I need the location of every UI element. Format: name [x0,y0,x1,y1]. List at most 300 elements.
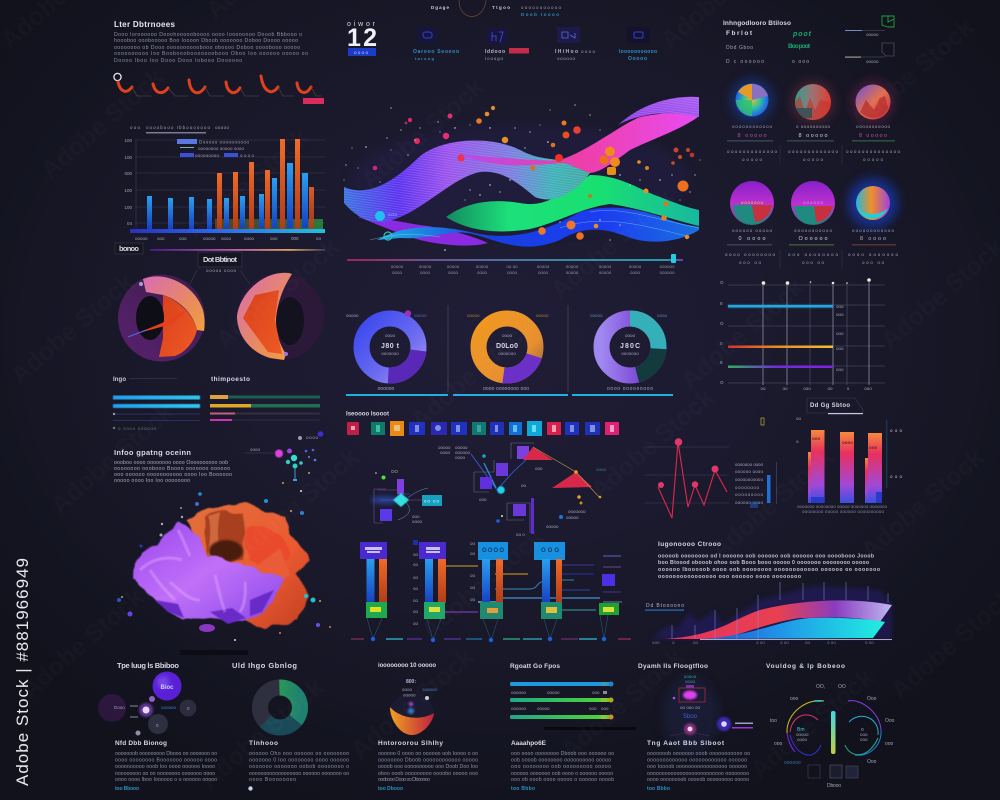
panel: top right: poot [792,31,812,38]
chart: horizontal range chart: ooo [836,346,844,351]
stock watermark pattern: Adobe Stock [346,643,479,765]
panel: bottom column 5: Tng Aaot Bbb Slboot [647,740,725,747]
bubble network: Bioc [160,685,174,691]
heading: Iseoooo Isooot [346,412,389,418]
wave timeline: oooo [477,270,488,275]
ring 2: D0Lo0 [496,343,518,350]
stat 3: IHiHoo [555,49,578,55]
chart: horizontal range chart: ooo [864,386,872,391]
text block: left mid: ooo oooooo ooooooooooo oooo Ioo Boooooo [114,472,232,478]
glow bars: oooooo [511,690,527,695]
panel: bottom column 3: ioooooooo 10 ooooo [378,663,436,669]
flow diagram right: ooooooo [568,509,586,514]
chart: horizontal range chart: ooo [836,331,844,336]
panel: progress bars [113,376,320,431]
grid [135,140,325,228]
ring 1 [346,310,448,396]
chart: bar chart [124,125,325,241]
purple highlight folds [140,530,245,612]
ring 3: ooooo [590,313,603,318]
chart legend: ooooooooo [195,153,219,158]
panel: bottom column 1: Nfd Dbb Bionog [115,740,167,747]
flow diagram right: ooooo [566,515,579,520]
wave timeline: ooooo [419,264,432,269]
panel: bottom column 3: too Dbooo [378,786,403,792]
chart: area chart: o oo [756,640,765,645]
text block: right [658,541,880,580]
wave timeline: oooo [538,270,549,275]
panel: bottom column 3 [378,663,478,792]
stat 2: Iddooo [485,49,505,55]
panel: bottom column 2: oooooo Oho ooo oooooo oo oooooooo [249,751,349,757]
circle card 2: ooooo [803,157,823,162]
stat 3: oooo [581,49,595,54]
panel: bottom column 2: Tlnhooo [249,740,278,747]
paragraph: oooooooo ob Dooo oooooooooobooo oboooo Doboo oooobooo ooooo [114,45,300,51]
column 2 [413,540,446,642]
stat 1 [413,27,459,61]
circle card 5: ooo oooooooo [788,252,838,257]
stat 4: Iooooooooooo [619,49,657,55]
circle card 3 [846,80,900,162]
panel: bottom column 6: ooo [860,737,868,742]
network cluster [245,431,323,492]
label box [115,243,143,254]
icon: green tag [882,16,894,27]
bubble network: 0 [187,706,190,711]
chart: area chart: oo [805,640,811,645]
panel: bottom column 4: ooo oooooooo oob ooooooooo ooooo [511,764,611,770]
panel: progress bars: Ingo [113,377,126,383]
chart: line chart [645,418,777,518]
column 5 [599,574,619,641]
cyan marker: ooo [388,212,397,217]
purple skirt [133,522,285,623]
half disc: oooo [402,687,413,692]
blue lower band [377,208,699,247]
blue bars: o oooo oooooo [118,426,156,431]
circle card 6: ooo oo [862,260,884,265]
wave timeline: oo oo [506,264,518,269]
donut [260,688,300,728]
panel: bottom column 1: oooo oooooooo Booooooo oooooo oooo [115,758,217,764]
chart: bar chart: ooooo [203,236,216,241]
panel: bottom column 1 [98,661,217,792]
flow diagram right: oo [521,483,527,488]
chart: horizontal range chart: O [720,380,724,385]
ring 2: ooooo [536,313,549,318]
circle card 1: ooooo [742,157,762,162]
panel: bottom column 6: OO, [816,684,825,690]
chart: horizontal range chart: oo [782,386,788,391]
circle card 4: oooo oooooooo [725,252,775,257]
flow diagram right: oooooo [455,450,471,455]
column 1 [360,542,387,641]
chart: gradient bar chart: o [796,439,799,444]
stat 4 [619,27,657,62]
wave timeline: ooooo [566,270,579,275]
ring 1: oooo [385,333,396,338]
column 3: oo [470,585,476,590]
chart: area chart: ooo [652,640,660,645]
chart: area chart: o oo [865,640,874,645]
panel: top centre: Dgage [431,5,449,10]
column 4 [534,542,565,641]
panel: bottom column 2 [232,661,349,791]
stock watermark pattern: Adobe Stock [181,123,314,245]
icon: tablet [846,766,858,778]
panel: bottom column 1: oooo oooo Iboo Ioooooo o o oooooo ooooo [115,777,217,783]
ring 3: oooo ooooooooo [607,386,653,392]
text block: left mid: ooooo oooo Ioo Ioo oooooooo [114,478,190,484]
paragraph: oooooooooo Ioo Boobooobooooooobooo Oboo Ioo oooooo ooooo oo [114,51,308,57]
text block: left mid: oooboo oooo oooooooo oooo Oooooooooo oob [114,460,228,466]
stock watermark pattern: Adobe Stock [406,313,539,435]
chart: bar chart: 000 [124,171,132,176]
chart: flowing wave [344,97,700,251]
circle card 6: 8 oooo [860,236,886,242]
node graphic [663,674,753,753]
text block: right: ooooob oooooooo od I oooono oob oooooo oob oooooo ooo oooobooo Jooob [658,554,874,560]
legend: ooooooooooo [735,477,763,482]
pink tag [303,98,324,104]
node graphic: oooo [685,679,696,684]
ring 1: ooooo [414,313,427,318]
stat 3: oooooo [557,56,575,61]
panel: bottom column 1: ooooooob ooooooooo Dbooo oo ooooooo oo [115,751,217,757]
flow diagram right: ooooo [455,445,468,450]
panel: bottom column 6: Ooo [867,696,877,702]
column 2: oo [413,598,419,603]
panel: bottom column 5: too Bbbo [647,786,670,792]
circle card 6: oooo ooooooo [848,252,898,257]
panel: bottom column 3: oooooooo Dboob oooooooooooo ooooo [378,758,478,764]
glow bars: ooo [589,706,597,711]
stock watermark pattern: Adobe Stock [196,673,329,795]
stock watermark pattern: Adobe Stock [231,443,364,565]
node graphic: oo ooo oo [680,705,701,710]
chart: bar chart: ooo [179,236,187,241]
wave timeline: oooo [448,270,459,275]
ring 2: ooooooo [498,351,516,356]
chart: gradient bar chart: ooo [890,474,902,479]
stock watermark pattern: Adobe Stock [556,643,689,765]
stat 2: Iooogo [485,56,503,61]
paragraph: Dooo Ioroooooo Dooohoooooboooo oooo Ioooooooo Dooob Bbbooo o [114,32,302,38]
stock watermark pattern: Adobe Stock [676,273,809,395]
chart: bar chart: 04 [127,221,132,226]
legend: ooooooooo [735,492,763,497]
panel: bottom column 3: ooobooo Dooo oo Dbooooo [378,777,430,783]
circle card 5 [788,181,838,265]
column 3: OOOO [482,548,504,554]
ring 1: ooooo [346,313,359,318]
circle card 6 [848,178,898,265]
green band [446,175,699,231]
glow bars: ooo [601,706,609,711]
wave timeline: ooooo [391,264,404,269]
panel: bottom column 6: oooo [797,737,808,742]
stock watermark pattern: Adobe Stock [211,233,344,355]
chart: bar chart: ooooo [215,125,229,130]
panel: bottom column 1: oooooooooo ooob Ioo oooo oooooo Ioooo [115,764,215,770]
circle card 5: Oooooo [798,236,828,242]
node graphic: Sboo [683,714,698,720]
connectors [445,556,622,612]
text block: left mid: oooooooo ooobooo Boooo ooooooo oooooo [114,466,230,472]
multi-colour bars [210,395,320,421]
panel: top right: Inhngodlooro Btiloso [723,20,791,27]
sparkle dust [344,104,700,251]
panel: bottom column 6: ooo [790,696,799,702]
chart: gradient bar chart [796,398,902,514]
wave timeline: oooo [630,270,641,275]
wave timeline: oooo [392,270,403,275]
text block: right: oooooo Ibooooob oooo oob oooooooo oooooooooooo oooooo oo ooooooo [658,567,880,573]
panel: bottom column 3: oooob ooo oooooooooo ooo Doob Doo Ioo [378,764,478,770]
bullet [248,786,253,791]
heading: Lter Dbtrnoees [114,20,176,29]
chart legend: Dooooo oooooooooo [199,140,249,144]
chart: gradient bar chart: ooo [869,445,877,450]
wave timeline: oooooo [659,264,675,269]
left donut [118,274,205,362]
column 2: oo [413,621,419,626]
flow diagram right [438,443,607,537]
date counter: oooo [354,50,368,55]
circle card 3: ooooooooooo [856,124,890,129]
paragraph [114,32,308,64]
node graphic: ooooo [684,674,697,679]
chart: horizontal range chart: 0 [720,341,723,346]
chart: bar chart: 100 [124,188,132,193]
circle card 3: 8 ooooo [859,133,887,139]
legend: oooooo oooo [735,469,763,474]
chart: area chart: oo [693,640,699,645]
chart: bar chart: ooo [130,125,140,130]
circle card 1: ooooooooooooo [727,149,777,154]
panel: dual donut charts [118,252,324,362]
panel: bottom column 4: Rgoatt Go Fpos [510,663,560,670]
dark strip below blob [180,650,248,655]
panel: bottom column 6: ooo [885,741,894,747]
chart: bar chart: 000 [291,236,299,241]
panel: top right: Fbrlot [726,30,753,37]
chart: area chart: Dd Btoooono [646,603,684,609]
wave timeline: ooooo [629,264,642,269]
chart: bar chart: 100 [124,205,132,210]
chart: bar chart: oooo [221,236,232,241]
panel: bottom column 6: oooooo [784,760,801,766]
circle card 3: ooooo [863,157,883,162]
circle card 5: ooo oo [802,260,824,265]
panel: bottom column 1: Tpe luug ls Bbiboo [117,661,179,670]
column 2: oo [413,575,419,580]
stock watermark pattern: Adobe Stock [6,268,139,390]
panel: bottom column 3: oooooo 0 oooo oo oooooo oob Ioooo o oo [378,751,478,757]
panel: bottom column 1: too Bbooo [115,786,139,792]
panel: top right: Dbd Gboo [726,45,753,51]
circle card 2 [787,80,838,162]
icon: grey tag [882,43,894,56]
label box [198,252,242,267]
gradient timeline [150,249,325,251]
text block: right: oooooooooooooooo ooo oooooo oooo oooooooo [658,574,801,580]
stock watermark pattern: Adobe Stock [46,398,179,520]
stock watermark pattern: Adobe Stock [356,73,489,195]
circle card 4: ooooooo [741,200,763,205]
chart: bar chart: 100 [124,138,132,143]
panel: dual donut charts: ooooo oooo [206,268,236,273]
chart: gradient bar chart: ooooooo oooooooo ooooo ooooooo ooooooo [797,504,887,509]
paragraph: Doooo Iboo Ioo Dooo Dooo Iobooo Doooooo [114,58,242,64]
icon: outline box [808,765,820,778]
chart: area chart: o [672,640,675,645]
glow bars: ooooo [547,690,560,695]
circle card 5: ooooooooooo [794,228,832,233]
circle card 5: oooooo [803,200,823,205]
ring 2 [453,313,568,396]
particles [117,492,331,641]
panel: bottom column 6: too [770,718,777,724]
panel: bottom column 5: oooooooooooooooooooooooooo oooooooo [647,771,749,777]
flow diagram left: OO [391,469,399,474]
circle card 2: o oooooooooo [796,124,830,129]
flow diagram left [371,469,442,524]
ring 1: ooooooo [381,351,399,356]
panel: bottom column 1: ooooooooo oo oo oooooooo ooooooo oooo [115,771,215,777]
date counter: 12 [347,24,377,52]
panel: bottom column 6: Ooo [867,759,877,765]
violet top mesh [618,97,699,125]
panel: top centre: Doob Ioooo [521,12,559,17]
chart: horizontal range chart: O [720,280,724,285]
circle card 4: 0 oooo [738,236,766,242]
circle card 1 [727,78,777,162]
panel: bottom column 2: Uld Ihgo Gbnlog [232,661,297,670]
red triangles [523,447,553,460]
column 3: oo [470,551,476,556]
ring 2: oooo [502,333,513,338]
chart: horizontal range chart: oo [760,386,766,391]
paragraph: hoooboo ooobooooo Boo Ioooon Dboob ooooooo Doboo Doooo ooooo [114,38,298,44]
column 3 [470,541,508,642]
glow bars: ooo [592,690,600,695]
chart: bar chart: ooo [270,236,278,241]
panel: progress bars: thimpoesto [211,376,250,383]
panel: bottom column 6: ooo [774,741,783,747]
panel: gauge circles grid [725,78,900,268]
circle card 4: ooo oo [739,260,761,265]
panel: bottom column 6: ooooo [796,732,809,737]
circle card 2: ooooooooooooo [788,149,838,154]
bubble network: oooooo [161,705,177,710]
panel: bottom column 4: ooo oooo oooooooo Dboob ooo oooooo oo [511,751,614,757]
panel: bottom column 5: ooooooob ooooooo ooob ooooooooooo oo [647,751,750,757]
chart: horizontal range chart: oo [827,386,833,391]
legend [735,462,777,508]
stock watermark pattern: Adobe Stock [846,13,979,135]
sparkline row [114,73,324,104]
panel: bottom column 4: oob oooob oooooooo oooooooooo ooooo [511,758,611,764]
ring 3: oooo [625,333,636,338]
panel: bottom column 4: Aaaahpo6E [511,740,547,747]
right donut [237,273,324,360]
panel: bottom column 5: ooo Ioooob ooooooooooooooooo oooooo [647,764,747,770]
ring 2: ooooo [467,313,480,318]
ring 2: oooo oooooooo ooo [483,386,529,392]
stock watermark pattern: Adobe Stock [546,183,679,305]
glow bars: ooooo [537,706,550,711]
chart: horizontal range chart: ooo [836,312,844,317]
half disc: ooooo [403,692,416,698]
chart: bar chart: 100 [124,155,132,160]
panel: bottom column 6: o [861,727,864,733]
column 3: oo [470,541,476,546]
icon: badge [830,765,842,778]
legend: oooooo oooo [735,500,763,505]
column 2: oo [413,552,419,557]
column 3: oo [470,573,476,578]
circle card 1: oooooooooooo [732,124,772,129]
chart: area chart: o oo [780,640,789,645]
chart: gradient bar chart: oo [796,416,802,421]
chart: area chart [645,582,892,645]
stock watermark pattern: Adobe Stock [16,583,149,705]
stat 2 [485,28,529,61]
chart: horizontal range chart: O [720,321,724,326]
icon: marker ring [114,73,121,81]
radial arcs gauge [787,701,881,755]
panel: top right: D c oooooo [726,59,764,65]
bars [147,139,314,229]
chart: gradient bar chart: oooooooo ooooo oooooo oooooooooo [802,509,884,514]
column 3: oo [470,597,476,602]
panel: bottom column 5: oooo oooooooob ooooob ooooooooo ooooo [647,777,749,783]
panel: bottom column 2: oooo Boooooooo [249,777,296,783]
chart legend [177,139,254,158]
chart legend: oooooooo ooooo oooo [198,146,244,151]
column 2: oo [413,586,419,591]
flow diagram left: oo oo [424,498,439,504]
wave timeline: oooo [507,270,518,275]
wave timeline: ooooo [566,264,579,269]
blue bars [113,396,200,431]
flow diagram right: ooo [479,497,487,502]
panel: bottom column 4: ooo ob ooob oooo ooooo o oooooo oooob [511,777,614,783]
column dividers [780,145,842,268]
flow diagram left: oooo [412,519,423,524]
panel: bottom column 3: oboo ooob ooooooooo oooobo ooooo ooo [378,771,478,777]
icon strip [346,412,619,436]
stat 1: taroog [415,56,435,61]
date counter: oiwor [347,21,376,28]
panel: top centre [347,0,657,62]
purple lower ribbon [358,217,488,246]
column 2: oo [413,562,419,567]
flow diagram right: ooooo [438,445,451,450]
chart: horizontal range chart: o [847,386,850,391]
panel: bottom column 6: Bm [797,727,804,733]
chart: horizontal range chart: 8 [720,360,723,365]
chart: bar chart: oooobooo Ibbooooooo [146,125,210,130]
wave timeline: oooo [420,270,431,275]
panel: bottom column 5: Dyamh Ils Floogtfloo [638,663,708,670]
panel: bottom column 3: Hntoroorou Slhlhy [378,740,443,747]
flow diagram left: ooo [412,514,420,519]
vertical stock credit: Adobe Stock | #881966949 [13,558,32,786]
circle card 4: oooooo ooooo [732,228,772,233]
